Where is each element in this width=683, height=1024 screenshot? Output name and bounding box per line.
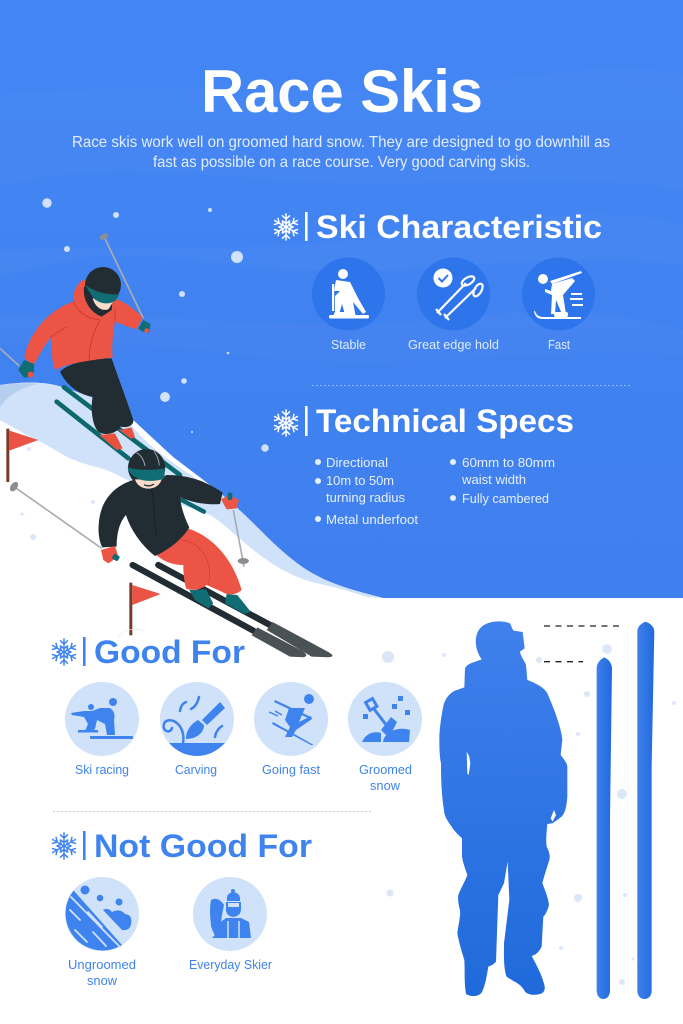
intro text: fast as possible on a race course. Very good carving skis. — [153, 154, 530, 171]
icon: groomed snow — [348, 682, 422, 756]
labels: good for: Groomed — [359, 763, 412, 777]
labels: good for — [75, 763, 412, 793]
heading: Ski Characteristic: Ski Characteristic — [316, 209, 602, 245]
skier: lower, black jacket — [8, 449, 332, 657]
skier: upper, red jacket — [0, 232, 180, 475]
technical specs list: Directional — [326, 456, 388, 470]
flag: lower gate — [118, 583, 161, 637]
heading: Good For: Good For — [94, 634, 245, 670]
labels: good for: Ski racing — [75, 763, 129, 777]
icon: carving — [160, 682, 234, 756]
labels: ski characteristics — [331, 338, 570, 352]
person silhouette — [439, 621, 567, 996]
icon: everyday skier — [193, 877, 267, 951]
labels: good for: Going fast — [262, 763, 321, 777]
labels: not good for — [68, 958, 272, 988]
labels: ski characteristics: Fast — [548, 338, 570, 352]
labels: not good for: snow — [87, 974, 118, 988]
snow hill — [0, 383, 383, 1024]
technical specs list: 60mm to 80mm — [462, 456, 555, 470]
labels: ski characteristics: Stable — [331, 338, 366, 352]
flag: upper gate — [6, 429, 38, 482]
labels: good for: snow — [370, 779, 401, 793]
intro text — [72, 134, 610, 171]
icon: great edge hold — [417, 258, 490, 330]
long ski — [637, 622, 654, 999]
technical specs list: turning radius — [326, 491, 405, 505]
labels: ski characteristics: Great edge hold — [408, 338, 499, 352]
icon: ski racing — [65, 682, 139, 756]
intro text: Race skis work well on groomed hard snow. They are designed to go downhill as — [72, 134, 610, 151]
icon: fast — [522, 258, 595, 330]
short ski — [597, 657, 612, 999]
icon: ungroomed snow — [65, 877, 139, 951]
height markers — [544, 626, 624, 662]
icon: stable — [312, 258, 385, 330]
icon: going fast — [254, 682, 328, 756]
technical specs list: 10m to 50m — [326, 474, 394, 488]
technical specs list — [315, 456, 555, 527]
technical specs list: Metal underfoot — [326, 513, 419, 527]
heading: Not Good For: Not Good For — [94, 828, 312, 864]
title: Race Skis — [201, 58, 483, 125]
technical specs list: waist width — [461, 473, 526, 487]
blue background panel — [0, 0, 683, 598]
labels: not good for: Ungroomed — [68, 958, 136, 972]
labels: good for: Carving — [175, 763, 217, 777]
technical specs list: Fully cambered — [462, 492, 549, 506]
snow dots — [20, 198, 676, 985]
labels: not good for: Everyday Skier — [189, 958, 272, 972]
heading: Technical Specs: Technical Specs — [316, 403, 574, 439]
